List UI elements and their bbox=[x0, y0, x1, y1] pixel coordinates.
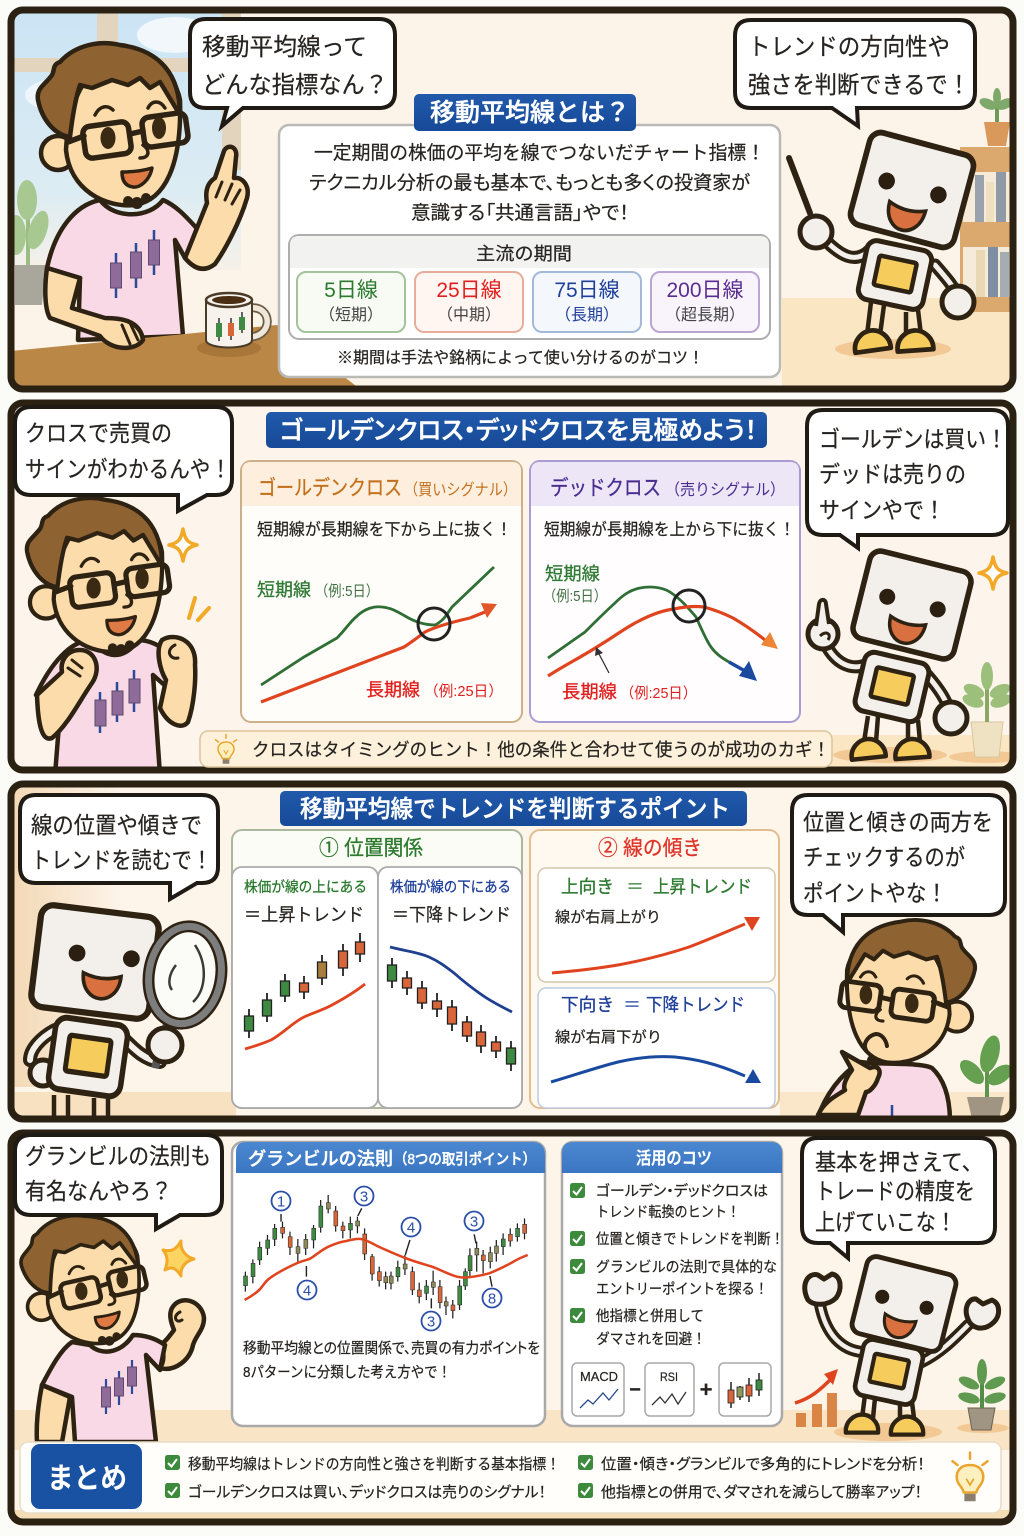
card: golden cross: （買いシグナル） bbox=[404, 481, 517, 499]
icon: plant bbox=[960, 1036, 1010, 1116]
speech bubble: robot bbox=[802, 1138, 995, 1258]
plus sign: + bbox=[700, 1377, 712, 1402]
card: golden cross: 短期線が長期線を下から上に抜く！ bbox=[257, 520, 512, 539]
speech bubble: man bbox=[792, 795, 1005, 932]
card: granville law: 3 bbox=[360, 1188, 368, 1206]
panel 1: what is a moving average bbox=[6, 10, 1015, 389]
icon: plant bbox=[957, 1359, 1009, 1433]
speech bubble: robot: 基本を押さえて、 bbox=[815, 1149, 983, 1175]
sub panel: below line: ＝下降トレンド bbox=[392, 905, 511, 925]
summary bar: ゴールデンクロスは買い、デッドクロスは売りのシグナル！ bbox=[188, 1483, 546, 1501]
heading: trend points: 移動平均線でトレンドを判断するポイント bbox=[300, 796, 730, 823]
5-day line bbox=[297, 272, 405, 332]
75-day line: 75日線 bbox=[554, 279, 620, 302]
table bbox=[11, 325, 360, 389]
icon: plant on shelf bbox=[980, 88, 1010, 146]
speech bubble: man: 位置と傾きの両方を bbox=[803, 809, 993, 835]
definition card bbox=[279, 94, 780, 377]
card: granville law: 8 bbox=[488, 1290, 496, 1308]
card: golden cross: 短期線 bbox=[257, 580, 311, 600]
summary label: まとめ bbox=[47, 1463, 127, 1495]
shirt candlesticks bbox=[102, 1360, 136, 1414]
card: golden cross: ゴールデンクロス bbox=[258, 477, 402, 500]
speech bubble: robot bbox=[807, 410, 1008, 548]
main periods box bbox=[289, 235, 770, 339]
speech bubble: robot: トレードの精度を bbox=[815, 1178, 975, 1204]
card: granville law: 8パターンに分類した考え方やで！ bbox=[243, 1364, 451, 1381]
sub panel: above line: 株価が線の上にある bbox=[244, 879, 367, 896]
icon: mug with candles bbox=[197, 293, 267, 357]
card: practical tips: ゴールデン・デッドクロスは bbox=[596, 1182, 768, 1200]
card: golden cross: （例:5日） bbox=[315, 583, 379, 600]
speech bubble: robot: 強さを判断できるで！ bbox=[748, 72, 970, 99]
5-day line: 5日線 bbox=[324, 279, 378, 302]
card: granville law: グランビルの法則 bbox=[248, 1149, 393, 1169]
icon: sparkle right bbox=[979, 557, 1007, 589]
card: practical tips: 他指標と併用して bbox=[596, 1308, 704, 1325]
speech bubble: man: サインがわかるんや！ bbox=[25, 456, 231, 482]
sub panel: below line bbox=[378, 867, 522, 1108]
25-day line: 25日線 bbox=[436, 279, 502, 302]
mini indicator: RSI: RSI bbox=[660, 1370, 678, 1384]
summary bar bbox=[20, 1442, 1001, 1513]
speech bubble: man: グランビルの法則も bbox=[25, 1143, 211, 1169]
card: dead cross: 短期線が長期線を上から下に抜く！ bbox=[544, 520, 795, 539]
heading: what is moving average bbox=[414, 94, 636, 131]
75-day line: （長期） bbox=[555, 306, 619, 324]
card: dead cross: デッドクロス bbox=[550, 477, 661, 500]
200-day line: 200日線 bbox=[666, 279, 744, 302]
card: dead cross: （例:25日） bbox=[620, 685, 697, 702]
shirt candlesticks bbox=[110, 230, 160, 298]
card: granville law: 1 bbox=[277, 1194, 285, 1210]
card: granville law: 3 bbox=[427, 1314, 435, 1330]
summary label bbox=[31, 1444, 142, 1509]
card: granville law: 4 bbox=[407, 1220, 415, 1236]
speech bubble: man: ポイントやな！ bbox=[803, 880, 947, 906]
panel 4: granville and summary bbox=[11, 1133, 1013, 1522]
speech bubble: robot: ゴールデンは買い！ bbox=[819, 426, 1007, 452]
mini indicator: RSI bbox=[645, 1363, 694, 1416]
summary bar: 移動平均線はトレンドの方向性と強さを判断する基本指標！ bbox=[188, 1456, 560, 1473]
speech bubble: robot: トレンドを読むで！ bbox=[31, 847, 212, 873]
card: golden cross bbox=[241, 461, 522, 722]
card: dead cross: 短期線 bbox=[545, 564, 600, 584]
sub panel: upward: 上向き bbox=[561, 877, 614, 897]
mini indicator: candles bbox=[719, 1363, 771, 1416]
robot with magnifying glass bbox=[30, 904, 229, 1119]
card: granville law: （8つの取引ポイント） bbox=[394, 1151, 536, 1168]
speech bubble: man: クロスで売買の bbox=[25, 420, 172, 446]
200-day line: （超長期） bbox=[665, 306, 745, 324]
heading: golden and dead cross: ゴールデンクロス・デッドクロスを見極めよう！ bbox=[280, 416, 757, 445]
sub panel: upward: ＝ bbox=[626, 877, 644, 897]
hint bar bbox=[200, 731, 832, 767]
sub panel: upward bbox=[538, 868, 775, 982]
panel 3: judging trend bbox=[11, 784, 1016, 1122]
sub panel: downward: ＝ bbox=[623, 995, 641, 1015]
icon: sparkle bbox=[169, 529, 197, 561]
icon: plant by window bbox=[14, 180, 48, 305]
hint bar: クロスはタイミングのヒント！他の条件と合わせて使うのが成功のカギ！ bbox=[252, 740, 830, 760]
card: dead cross: （売りシグナル） bbox=[665, 481, 785, 499]
minus sign: − bbox=[629, 1379, 641, 1401]
chart: dead cross lines bbox=[548, 587, 778, 681]
chart: granville candles and moving average bbox=[244, 1195, 528, 1318]
footnote: ※期間は手法や銘柄によって使い分けるのがコツ！ bbox=[337, 349, 704, 367]
definition text: 意識する「共通言語」やで！ bbox=[411, 202, 629, 224]
card: practical tips: グランビルの法則で具体的な bbox=[596, 1259, 777, 1276]
character: man with fist bbox=[17, 1210, 204, 1442]
robot pointing bbox=[808, 549, 973, 763]
circled trading points bbox=[272, 1186, 502, 1330]
card: practical tips: 活用のコツ bbox=[636, 1149, 712, 1168]
card: granville law: 3 bbox=[470, 1214, 478, 1230]
robot teacher bbox=[789, 130, 976, 359]
sub panel: above line bbox=[232, 867, 378, 1108]
card: granville law: 4 bbox=[303, 1282, 311, 1300]
icon: rising bars with arrow bbox=[795, 1369, 838, 1427]
card: dead cross bbox=[530, 461, 800, 722]
speech bubble: robot: トレンドの方向性や bbox=[748, 34, 950, 61]
bookshelf bbox=[960, 147, 1013, 312]
man's resting arm bbox=[45, 268, 143, 348]
window bbox=[11, 10, 241, 270]
card: dead cross: 長期線 bbox=[562, 682, 617, 702]
mini indicator: MACD: MACD bbox=[580, 1370, 618, 1384]
card: dead cross: （例:5日） bbox=[543, 588, 607, 605]
excitement marks bbox=[189, 598, 209, 620]
card: practical tips: エントリーポイントを探る！ bbox=[596, 1281, 768, 1298]
speech bubble: robot: サインやで！ bbox=[819, 497, 945, 523]
character: man with fists bbox=[27, 498, 195, 775]
speech bubble: robot: 上げていこな！ bbox=[815, 1209, 956, 1235]
card: practical tips: ダマされを回避！ bbox=[596, 1331, 706, 1348]
speech bubble: robot bbox=[735, 20, 975, 126]
icon: light bulb bbox=[952, 1452, 988, 1501]
card: position relation: ① 位置関係 bbox=[319, 837, 423, 860]
card: practical tips: 位置と傾きでトレンドを判断！ bbox=[596, 1231, 784, 1248]
robot cheering bbox=[805, 1255, 999, 1441]
card: golden cross: （例:25日） bbox=[424, 683, 503, 700]
floor bbox=[782, 298, 1013, 389]
speech bubble: man: 移動平均線って bbox=[202, 34, 367, 61]
card: slope: ② 線の傾き bbox=[598, 837, 702, 860]
definition text bbox=[309, 142, 765, 224]
speech bubble: man: 有名なんやろ？ bbox=[25, 1178, 172, 1204]
definition text: 一定期間の株価の平均を線でつないだチャート指標！ bbox=[314, 142, 765, 164]
sub panel: downward: 線が右肩下がり bbox=[555, 1029, 662, 1046]
main periods box: 主流の期間 bbox=[476, 244, 572, 264]
chart: rising candles bbox=[244, 933, 364, 1038]
speech bubble: man: チェックするのが bbox=[803, 844, 965, 870]
sub panel: above line: ＝上昇トレンド bbox=[244, 905, 364, 925]
icon: star bbox=[163, 1241, 194, 1276]
summary bar: 位置・傾き・グランビルで多角的にトレンドを分析！ bbox=[601, 1455, 925, 1473]
character: man pointing bbox=[38, 43, 248, 340]
icon: plant bbox=[949, 662, 1010, 763]
panel 2: golden cross and dead cross bbox=[11, 403, 1024, 775]
speech bubble: man bbox=[15, 407, 232, 511]
card: position relation bbox=[232, 830, 522, 1108]
heading: what is moving average: 移動平均線とは？ bbox=[430, 99, 630, 127]
card: slope bbox=[530, 830, 779, 1108]
definition text: テクニカル分析の最も基本で、もっとも多くの投資家が bbox=[309, 172, 750, 194]
sub panel: upward: 線が右肩上がり bbox=[555, 909, 661, 926]
chart: golden cross lines bbox=[261, 567, 497, 702]
75-day line bbox=[533, 272, 641, 332]
200-day line bbox=[651, 272, 759, 332]
5-day line: （短期） bbox=[319, 306, 383, 324]
character: thinking man bbox=[816, 920, 975, 1122]
card: granville law: 移動平均線との位置関係で、売買の有力ポイントを bbox=[243, 1340, 540, 1357]
sub panel: downward: 下降トレンド bbox=[646, 995, 745, 1015]
speech bubble: man: どんな指標なん？ bbox=[202, 72, 388, 99]
summary bar: 他指標との併用で、ダマされを減らして勝率アップ！ bbox=[601, 1484, 922, 1501]
card: practical tips bbox=[562, 1142, 784, 1426]
card: practical tips: トレンド転換のヒント！ bbox=[596, 1204, 740, 1221]
chart: falling candles bbox=[388, 958, 516, 1071]
speech bubble: man bbox=[190, 19, 395, 126]
25-day line: （中期） bbox=[437, 306, 501, 324]
shirt candlesticks bbox=[95, 670, 140, 733]
sub panel: upward: 上昇トレンド bbox=[653, 877, 752, 897]
sub panel: below line: 株価が線の下にある bbox=[390, 879, 511, 896]
sub panel: downward bbox=[538, 988, 775, 1108]
sub panel: downward: 下向き bbox=[561, 995, 614, 1015]
card: golden cross: 長期線 bbox=[366, 680, 420, 700]
speech bubble: man bbox=[15, 1135, 222, 1229]
25-day line bbox=[415, 272, 523, 332]
mini indicator: MACD bbox=[572, 1363, 624, 1416]
speech bubble: robot: デッドは売りの bbox=[819, 461, 966, 487]
card: granville law bbox=[232, 1142, 545, 1426]
speech bubble: robot: 線の位置や傾きで bbox=[31, 812, 202, 838]
speech bubble: robot bbox=[20, 795, 218, 899]
